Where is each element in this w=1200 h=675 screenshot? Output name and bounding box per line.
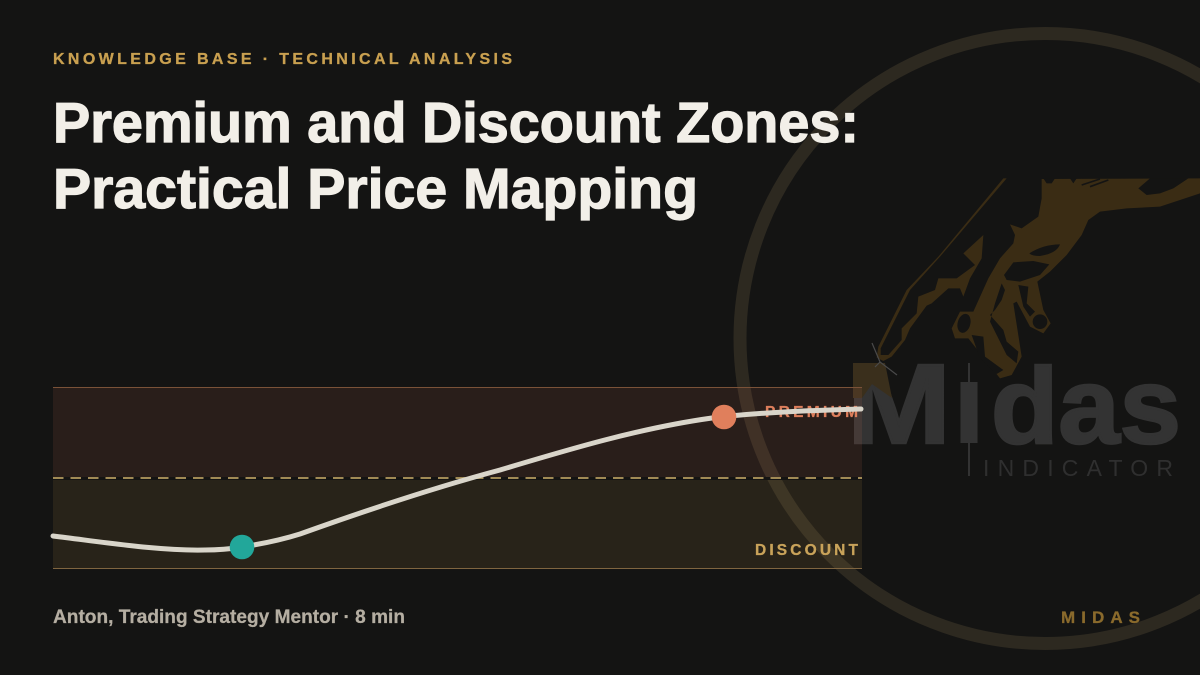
- eyebrow: KNOWLEDGE BASE · TECHNICAL ANALYSIS: [53, 51, 512, 68]
- index finger: [877, 178, 1007, 361]
- logo candle: [960, 363, 978, 476]
- chart: price zones: [53, 388, 862, 568]
- author line: Anton, Trading Strategy Mentor · 8 min: [53, 607, 405, 628]
- brand wordmark: MIDAS: [1061, 608, 1140, 627]
- discount label: DISCOUNT: [755, 542, 859, 559]
- discount marker: [230, 535, 254, 559]
- icon: midas hand: [877, 178, 1200, 378]
- title: Practical Price Mapping: [53, 157, 698, 221]
- premium label: PREMIUM: [765, 404, 858, 421]
- discount zone: [53, 478, 862, 568]
- premium zone: [53, 388, 862, 478]
- sparkle: [872, 343, 897, 375]
- title: [53, 91, 859, 221]
- decorative ring: [740, 34, 1200, 644]
- finger nails: [955, 312, 1047, 334]
- price curve: [53, 409, 861, 550]
- logo letters das: das: [991, 345, 1181, 466]
- logo letter M: M: [847, 341, 951, 467]
- title: Premium and Discount Zones:: [53, 91, 859, 155]
- premium marker: [712, 405, 736, 429]
- logo subtitle: INDICATOR: [983, 455, 1173, 481]
- midas indicator logo: [847, 341, 1181, 481]
- midline: [53, 477, 862, 480]
- hand tint over M: [853, 363, 892, 398]
